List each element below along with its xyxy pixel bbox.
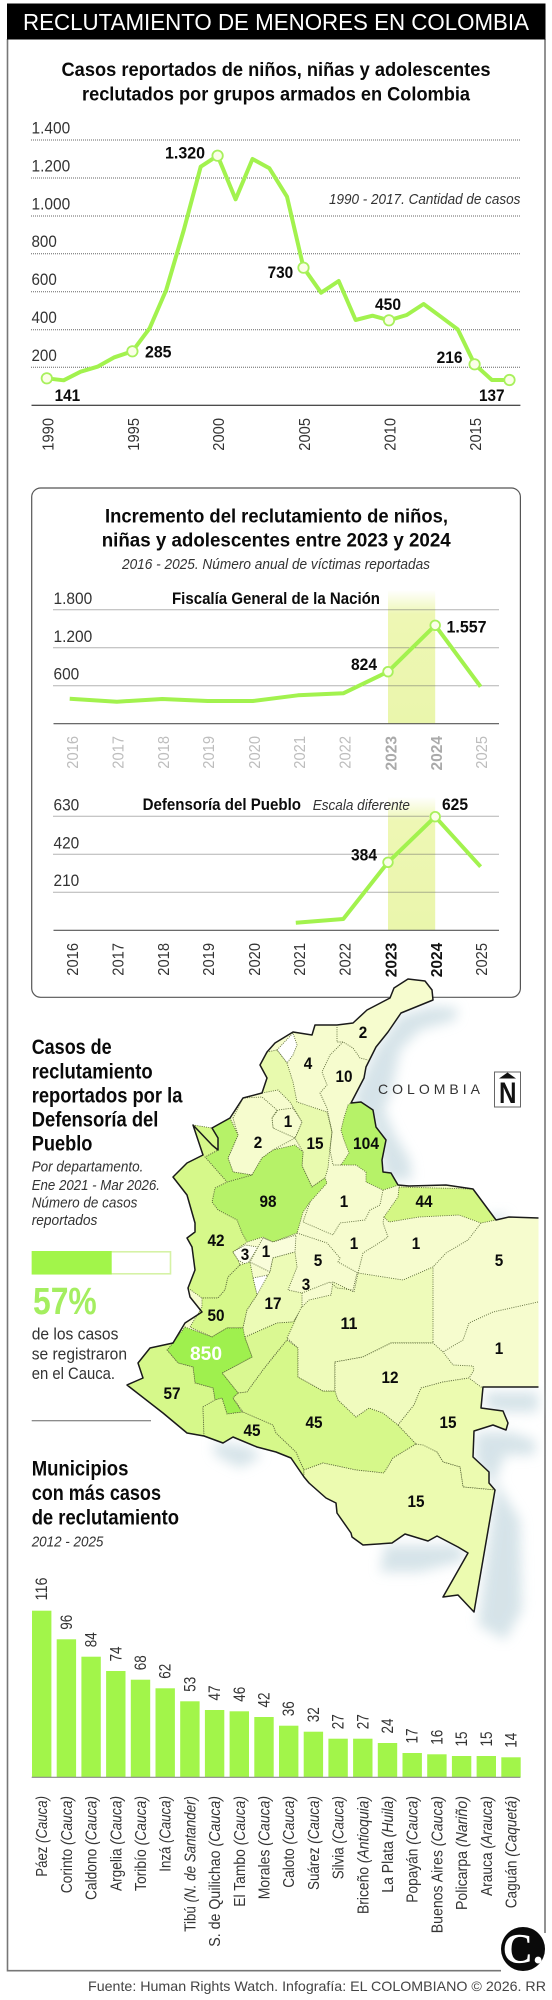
panel: increase 2023-2024 [32, 488, 520, 997]
chart: Fiscalía: 2024 [429, 736, 446, 770]
chart: Fiscalía: 600 [54, 665, 79, 683]
callout: 57% [32, 1281, 127, 1383]
bar values: 42 [256, 1692, 274, 1708]
highlighted points [42, 150, 515, 385]
x axis years: 2015 [468, 418, 485, 451]
chart: Fiscalía: 2018 [156, 736, 173, 769]
bar names: Popayán (Cauca) [405, 1796, 422, 1903]
y axis labels [32, 120, 70, 365]
panel: historical line chart 1990-2017 [31, 60, 521, 451]
department values: 2 [359, 1024, 367, 1042]
bar names: El Tambo (Cauca) [232, 1796, 249, 1907]
chart: Defensoría: Escala diferente [313, 797, 410, 814]
value labels: 450 [375, 295, 401, 314]
value labels: 730 [268, 263, 293, 282]
chart: Defensoría: 2017 [110, 943, 128, 976]
text block: map heading: reportados por la [32, 1084, 183, 1108]
department values: 15 [440, 1414, 456, 1432]
department values: 45 [306, 1414, 322, 1432]
department values: 42 [208, 1232, 224, 1250]
y axis labels: 1.000 [32, 196, 70, 214]
department values: 98 [260, 1193, 276, 1211]
text block: map heading: Defensoría del [32, 1108, 158, 1132]
y axis labels: 800 [32, 233, 57, 251]
bar values: 74 [107, 1646, 125, 1662]
bar names: Toribío (Cauca) [133, 1796, 150, 1891]
value labels: 1.320 [165, 144, 205, 163]
chart: Fiscalía: 1.200 [54, 628, 92, 646]
chart: Defensoría: 2024 [429, 943, 446, 977]
department values: 17 [264, 1295, 282, 1313]
chart: Fiscalía: 1.557 [446, 618, 487, 637]
text block: map heading: reclutamiento [32, 1059, 153, 1083]
y axis labels: 400 [32, 309, 57, 327]
chart: Defensoría: 2016 [65, 943, 82, 976]
bar values: 27 [354, 1714, 372, 1729]
chart: Defensoría: Defensoría del Pueblo [143, 796, 301, 814]
department values: 3 [241, 1246, 249, 1264]
chart: Defensoría [54, 795, 499, 977]
department values: 10 [336, 1068, 352, 1086]
text block: map heading: Pueblo [32, 1132, 92, 1156]
bar values: 68 [132, 1655, 150, 1670]
bar values: 27 [330, 1714, 348, 1729]
x axis years: 2000 [211, 418, 228, 451]
x axis years: 2005 [297, 418, 314, 451]
department values: 1 [284, 1113, 292, 1131]
text block: map subtitle: Ene 2021 - Mar 2026. [32, 1177, 160, 1194]
callout: 57%: 57% [33, 1281, 97, 1323]
text block: map heading [32, 1035, 183, 1156]
bar values: 17 [404, 1728, 422, 1744]
chart: Defensoría: 210 [54, 872, 79, 890]
department values: 3 [302, 1276, 310, 1294]
callout: 57%: en el Cauca. [32, 1364, 115, 1383]
bar names: Argelia (Cauca) [108, 1796, 125, 1891]
y axis labels: 1.400 [32, 120, 70, 138]
department values [164, 1024, 503, 1511]
chart: Defensoría: 2019 [201, 943, 218, 976]
chart: Fiscalía: 1.800 [54, 590, 92, 608]
department values: 104 [353, 1135, 380, 1153]
value labels: 137 [479, 386, 505, 405]
map label: COLOMBIA: COLOMBIA [378, 1081, 481, 1097]
chart: Defensoría: 2025 [474, 943, 491, 976]
chart: Defensoría: 630 [54, 797, 79, 815]
text block: map subtitle [32, 1159, 160, 1229]
department values: 850 [190, 1344, 222, 1365]
department values: 15 [306, 1135, 324, 1153]
x axis years: 1995 [126, 418, 143, 451]
x axis years: 1990 [40, 418, 58, 451]
country outline [127, 979, 538, 1612]
chart: Fiscalía: 2022 [338, 736, 355, 769]
department values: 1 [350, 1235, 358, 1253]
y axis labels: 1.200 [32, 158, 70, 176]
bar values: 62 [157, 1664, 175, 1679]
bar names: Suárez (Cauca) [306, 1796, 323, 1890]
chart: Fiscalía: 2016 [65, 736, 82, 769]
department values: 11 [340, 1315, 358, 1333]
value labels: 285 [145, 342, 172, 362]
department values: 4 [304, 1055, 313, 1073]
department values: 1 [262, 1243, 270, 1261]
bar names: Buenos Aires (Cauca) [429, 1796, 446, 1933]
chart: Fiscalía [54, 590, 499, 770]
bar names: Morales (Cauca) [256, 1796, 274, 1899]
bar names: Policarpa (Nariño) [454, 1796, 471, 1910]
logo: El Colombiano: C. [503, 1927, 543, 1973]
subtitle: period: 1990 - 2017. Cantidad de casos [329, 191, 521, 208]
chart: Fiscalía: 2025 [474, 736, 491, 769]
text block: map subtitle: Número de casos [32, 1194, 138, 1211]
bar names [34, 1796, 520, 1947]
chart: Fiscalía: 2020 [247, 736, 264, 769]
department values: 1 [340, 1193, 348, 1211]
line series [47, 156, 510, 380]
chart: Fiscalía: Fiscalía General de la Nación [172, 590, 380, 608]
bar names: La Plata (Huila) [380, 1796, 397, 1893]
bar names: Inzá (Cauca) [158, 1796, 175, 1872]
bar names: Tibú (N. de Santander) [182, 1796, 199, 1932]
heading: increase: niñas y adolescentes entre 2023 y 2024 [102, 531, 451, 552]
bar values: 47 [206, 1686, 224, 1700]
title bar [7, 4, 546, 40]
department values: 5 [495, 1252, 503, 1270]
bar names: Caldono (Cauca) [84, 1796, 101, 1900]
heading: increase: Incremento del reclutamiento de niños, [105, 507, 448, 528]
text block: municipalities heading: Municipios [32, 1458, 128, 1481]
bar values: 53 [181, 1677, 199, 1692]
bar names: Caguán (Caquetá) [504, 1796, 520, 1908]
callout: 57%: de los casos [32, 1324, 118, 1343]
text block: map subtitle: Por departamento. [32, 1159, 143, 1176]
y axis labels: 600 [32, 271, 57, 289]
department values: 50 [208, 1307, 224, 1325]
bar values [33, 1578, 520, 1748]
bar names: Silvia (Cauca) [331, 1796, 348, 1879]
map: Colombia by department [127, 979, 538, 1640]
bar values: 96 [58, 1615, 76, 1630]
chart: Defensoría: 625 [442, 795, 468, 814]
heading: cases reported: reclutados por grupos armados en Colombia [82, 85, 470, 106]
bar values: 36 [280, 1701, 298, 1716]
bar values: 84 [83, 1632, 101, 1647]
text block: map subtitle: reportados [32, 1212, 98, 1229]
bar values: 46 [231, 1687, 249, 1702]
chart: Defensoría: 2020 [247, 943, 264, 976]
department values: 12 [382, 1369, 398, 1387]
y axis labels: 200 [32, 347, 57, 365]
chart: Fiscalía: 2021 [292, 736, 309, 769]
icon: north marker: N [499, 1077, 516, 1110]
department values: 45 [244, 1422, 260, 1440]
bar values: 14 [502, 1733, 520, 1748]
bar names: Arauca (Arauca) [479, 1796, 496, 1896]
heading: cases reported [62, 60, 490, 106]
departments [127, 1027, 538, 1612]
title bar: RECLUTAMIENTO DE MENORES EN COLOMBIA [23, 9, 529, 35]
text block: municipalities heading: con más casos [32, 1482, 161, 1505]
department values: 44 [416, 1193, 433, 1211]
bar values: 24 [379, 1718, 397, 1734]
bar values: 32 [305, 1707, 323, 1722]
subtitle: annual victims: 2016 - 2025. Número anual de víctimas reportadas [121, 556, 430, 573]
callout: 57%: se registraron [32, 1344, 127, 1363]
chart: Fiscalía: 2023 [383, 736, 400, 770]
text block: municipalities heading: de reclutamiento [32, 1506, 179, 1529]
department values: 2 [254, 1134, 262, 1152]
bar names: Corinto (Cauca) [59, 1796, 76, 1893]
chart: Defensoría: 420 [54, 835, 79, 853]
bar names: Caloto (Cauca) [281, 1796, 298, 1888]
text block: map heading: Casos de [32, 1035, 112, 1059]
chart: Fiscalía: 2017 [110, 736, 128, 769]
value labels [55, 144, 505, 405]
bar names: Páez (Cauca) [34, 1796, 51, 1877]
department values: 1 [495, 1340, 503, 1358]
chart: Fiscalía: 2019 [201, 736, 218, 769]
heading: cases reported: Casos reportados de niños, niñas y adolescentes [62, 60, 490, 81]
chart: Defensoría: 384 [351, 846, 377, 865]
x axis years: 2010 [382, 418, 400, 451]
department values: 1 [412, 1235, 420, 1253]
chart: Defensoría: 2021 [292, 943, 309, 976]
country base [127, 979, 538, 1612]
x axis years [40, 418, 485, 451]
coastal shadow [213, 1006, 538, 1640]
footer source: Fuente: Human Rights Watch. Infografía: EL COLOMBIANO © 2026. RR [88, 1978, 546, 1994]
bar chart: municipalities [32, 1578, 521, 1947]
chart: Defensoría: 2022 [338, 943, 355, 976]
bar names: S. de Quilichao (Cauca) [207, 1796, 224, 1947]
chart: Fiscalía: 824 [351, 655, 377, 674]
department values: 15 [408, 1493, 424, 1511]
value labels: 141 [55, 386, 80, 405]
bar values: 16 [428, 1730, 446, 1745]
heading: increase [102, 507, 451, 552]
text block: municipalities heading [31, 1458, 179, 1551]
bar values: 116 [33, 1578, 51, 1600]
bar values: 15 [478, 1732, 496, 1746]
chart: Defensoría: 2018 [156, 943, 173, 976]
bar names: Briceño (Antioquia) [355, 1796, 372, 1914]
bar values: 15 [453, 1732, 471, 1746]
department values: 5 [314, 1252, 322, 1270]
progress bar: 57% [32, 1251, 171, 1274]
value labels: 216 [437, 348, 463, 367]
department values: 57 [164, 1385, 180, 1403]
text block: municipalities heading: 2012 - 2025 [31, 1534, 104, 1551]
chart: Defensoría: 2023 [383, 943, 400, 977]
